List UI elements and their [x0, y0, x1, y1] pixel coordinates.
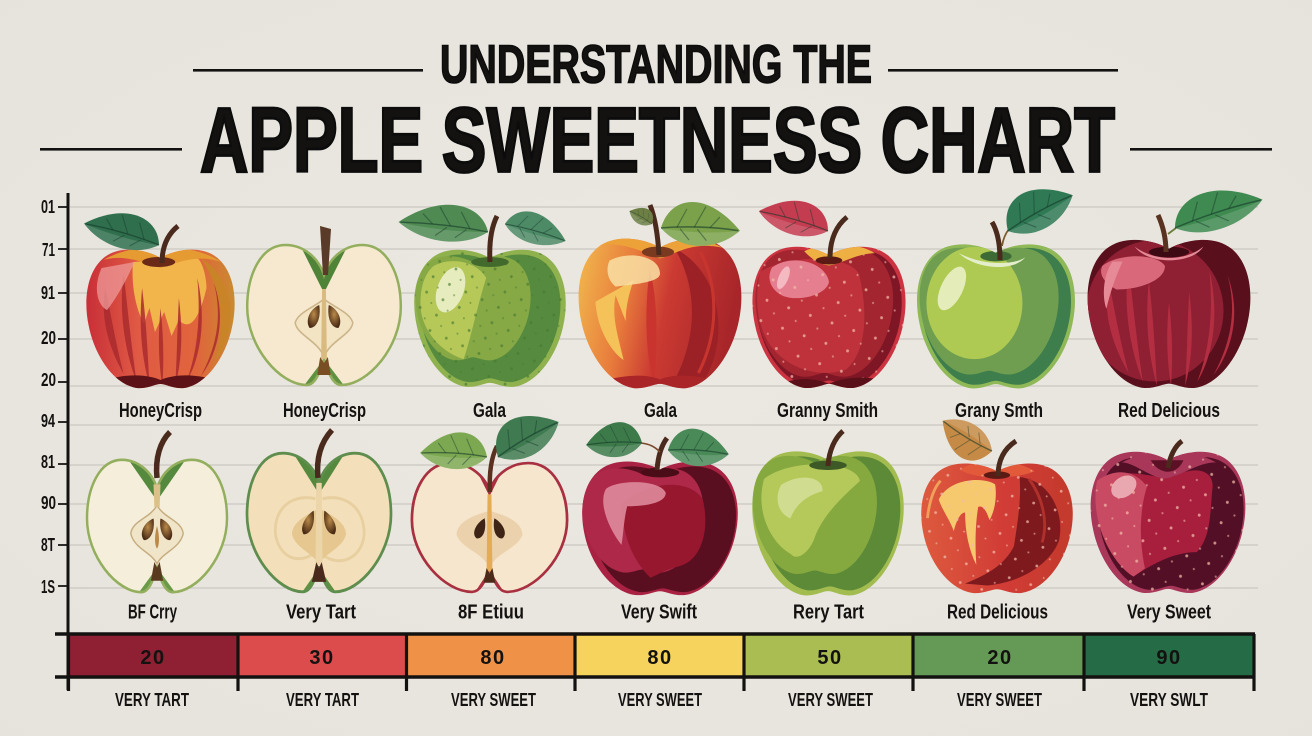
apple 4: gala red-yellow — [579, 201, 741, 392]
apple 10: halved red skin — [412, 400, 567, 594]
stem — [830, 217, 847, 258]
leaf — [996, 173, 1080, 245]
leaf — [1167, 176, 1267, 242]
y axis with grid lines and tick labels — [41, 193, 1258, 690]
scale labels: VERY SWEET — [618, 689, 702, 710]
stem — [490, 446, 497, 492]
apple 5: red speckled — [752, 190, 906, 392]
variety labels row 2: Red Delicious — [947, 602, 1048, 624]
scale labels: VERY SWEET — [788, 689, 873, 710]
stem — [1168, 441, 1182, 468]
variety labels row 2: Very Swift — [621, 602, 697, 624]
y axis with grid lines and tick labels: 71 — [42, 240, 55, 260]
variety labels row 1: Gala — [644, 400, 678, 422]
variety labels row 2: Rery Tart — [793, 602, 864, 624]
bar values — [140, 647, 1182, 669]
bar segments — [68, 634, 1254, 677]
variety labels row 2 — [128, 602, 1211, 624]
apple 3: green speckled — [397, 199, 571, 387]
bar values: 30 — [309, 647, 335, 669]
bar values: 80 — [647, 647, 673, 669]
variety labels row 2: Very Tart — [286, 602, 356, 624]
bar values: 80 — [480, 647, 506, 669]
apple 6: green glossy — [917, 189, 1075, 388]
variety labels row 1: HoneyCrisp — [119, 400, 202, 422]
bar values: 50 — [817, 647, 843, 669]
variety labels row 2: BF Crry — [128, 602, 178, 624]
leaf — [755, 190, 834, 244]
apple 8: halved pale — [87, 432, 227, 594]
scale labels: VERY TART — [286, 689, 359, 710]
bar values: 20 — [987, 647, 1013, 669]
scale labels — [115, 689, 1209, 710]
y axis with grid lines and tick labels: 90 — [41, 493, 56, 513]
y axis with grid lines and tick labels: 01 — [41, 197, 55, 217]
stem — [992, 222, 1000, 260]
stem — [490, 216, 497, 262]
variety labels row 1: Gala — [473, 400, 507, 422]
stem — [162, 226, 178, 263]
apple 7: red delicious — [1086, 176, 1267, 388]
y axis with grid lines and tick labels: 20 — [41, 370, 56, 390]
scale labels: VERY TART — [115, 689, 189, 710]
apple 12: green — [752, 431, 904, 595]
leaves — [397, 199, 491, 246]
title — [40, 34, 1272, 192]
stem — [320, 226, 331, 275]
bar values: 20 — [140, 647, 166, 669]
stem — [828, 431, 843, 466]
y axis with grid lines and tick labels: 94 — [41, 411, 55, 431]
title line 1: UNDERSTANDING THE — [440, 34, 872, 94]
leaf — [80, 202, 165, 258]
y axis with grid lines and tick labels: 20 — [41, 328, 56, 348]
variety labels row 1 — [119, 400, 1220, 422]
apple 13: red-orange speckled — [921, 409, 1073, 593]
variety labels row 1: Granny Smith — [777, 400, 878, 422]
leaves — [419, 430, 488, 471]
leaves — [660, 201, 741, 247]
apple 1: striped red-yellow — [80, 202, 235, 392]
variety labels row 2: Very Sweet — [1127, 602, 1211, 624]
y axis with grid lines and tick labels: 91 — [41, 283, 55, 303]
bar values: 90 — [1156, 647, 1182, 669]
stem — [657, 438, 667, 470]
stem — [998, 441, 1016, 476]
apple 14: crimson speckled — [1091, 441, 1245, 593]
variety labels row 2: 8F Etiuu — [458, 602, 524, 624]
sweetness scale bar — [55, 634, 1255, 691]
scale labels: VERY SWLT — [1130, 689, 1209, 710]
scale labels: VERY SWEET — [957, 689, 1042, 710]
stem — [1158, 215, 1166, 252]
leaves — [585, 421, 642, 458]
apple 9: halved tan — [247, 430, 391, 594]
y axis with grid lines and tick labels: 81 — [41, 452, 55, 472]
y axis with grid lines and tick labels: 1S — [41, 577, 55, 597]
variety labels row 1: Grany Smth — [955, 400, 1043, 422]
variety labels row 1: Red Delicious — [1118, 400, 1220, 422]
apple 11: dark red — [582, 421, 738, 595]
y axis with grid lines and tick labels: 8T — [41, 535, 55, 555]
stem — [157, 432, 170, 478]
scale labels: VERY SWEET — [451, 689, 536, 710]
leaf — [931, 409, 999, 469]
variety labels row 1: HoneyCrisp — [283, 400, 366, 422]
stem — [318, 430, 332, 478]
stem — [650, 205, 659, 255]
apple 2: halved — [247, 226, 401, 387]
